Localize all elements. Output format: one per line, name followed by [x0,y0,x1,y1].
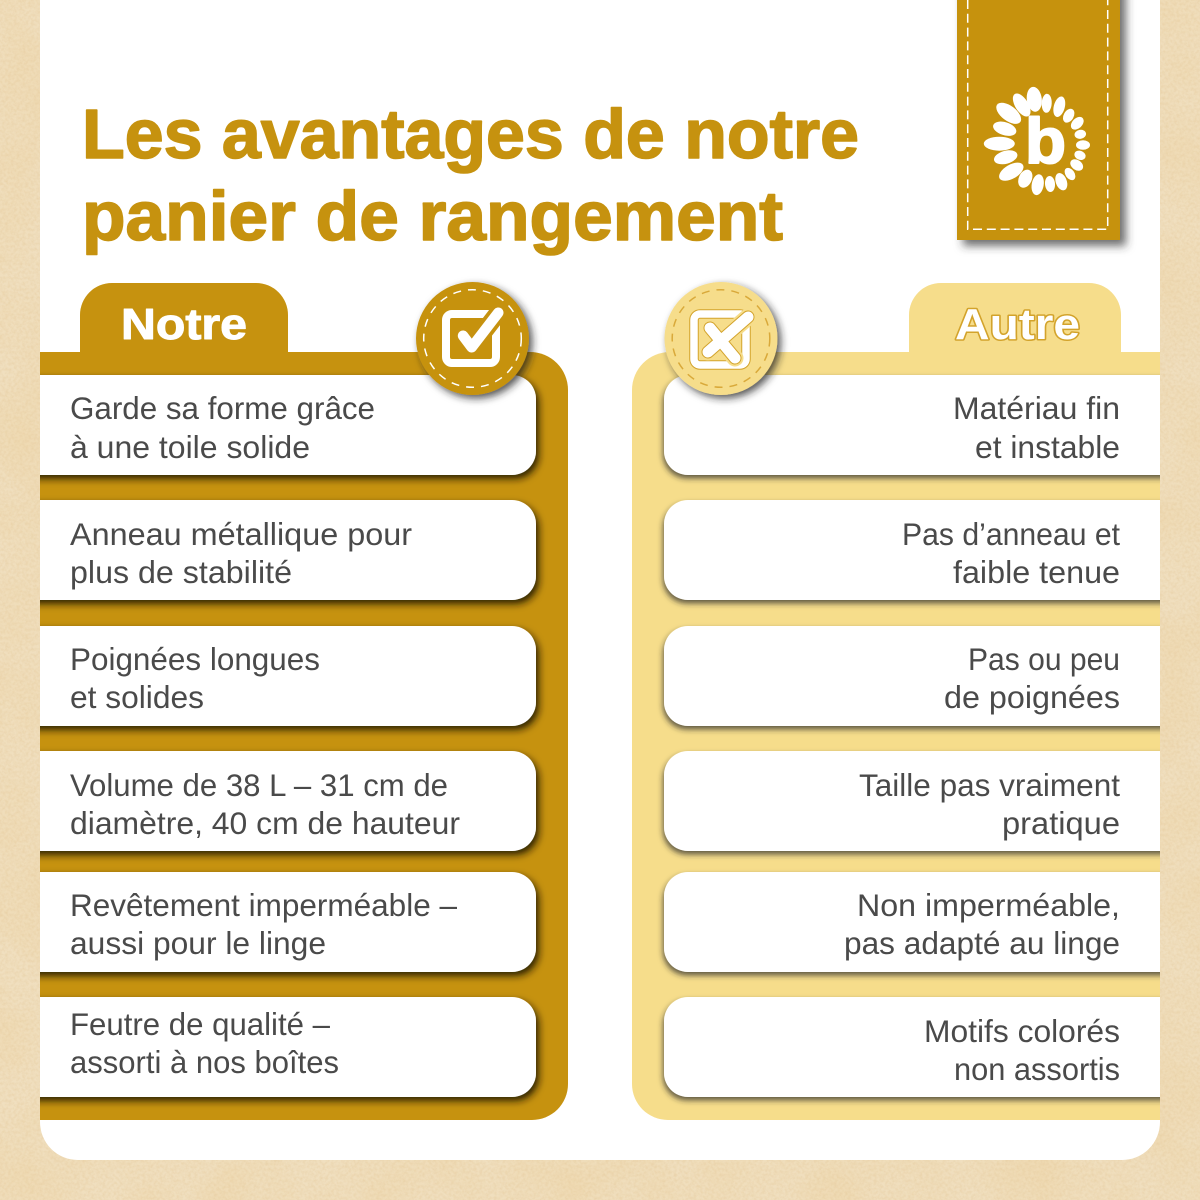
card: non imperméable: pas adapté au linge [844,925,1120,961]
card: matériau [664,375,1200,475]
card: pas de poignées: de poignées [944,679,1120,715]
card: feutre: Feutre de qualité – [70,1006,330,1042]
card: pas d'anneau: faible tenue [953,554,1120,590]
card: non imperméable: Non imperméable, [857,887,1120,923]
icon: cross badge [664,282,778,395]
title [82,95,859,255]
icon: check badge [416,282,529,395]
card: motifs [664,997,1200,1097]
card: poignées [0,626,536,726]
card: matériau: Matériau fin [953,390,1120,426]
card: toile solide: à une toile solide [70,429,310,465]
card: toile solide: Garde sa forme grâce [70,390,375,426]
card: pas de poignées [664,626,1200,726]
card: taille [664,751,1200,851]
panel: Autre [632,283,1200,1120]
panel background: Autre [632,352,1200,1120]
panel background: Notre [0,352,568,1120]
tab: Autre: Autre [955,300,1080,349]
card: poignées: et solides [70,679,204,715]
card: anneau métallique: Anneau métallique pour [70,516,412,552]
card: pas de poignées: Pas ou peu [968,641,1120,677]
card: poignées: Poignées longues [70,641,320,677]
title: panier de rangement [82,177,783,255]
card: taille: Taille pas vraiment [859,767,1120,803]
card: volume [0,751,536,851]
card: motifs: Motifs colorés [924,1013,1120,1049]
icon: sunflower logo: b [1025,105,1066,177]
card: non imperméable [664,872,1200,972]
title: Les avantages de notre [82,95,859,173]
card: volume: Volume de 38 L – 31 cm de [70,767,448,803]
card: feutre: assorti à nos boîtes [70,1044,339,1080]
card: matériau: et instable [975,429,1120,465]
tab: Notre: Notre [121,300,247,349]
card: revêtement [0,872,536,972]
icon: sunflower logo [984,86,1090,196]
brand tag [957,0,1120,240]
card: pas d'anneau: Pas d’anneau et [902,516,1120,552]
tab: Notre [80,283,288,352]
card: pas d'anneau [664,500,1200,600]
card: taille: pratique [1002,805,1120,841]
card: revêtement: Revêtement imperméable – [70,887,457,923]
card: anneau métallique: plus de stabilité [70,554,292,590]
card: toile solide [0,375,536,475]
card: feutre [0,997,536,1097]
tab: Autre [909,283,1121,352]
card: motifs: non assortis [954,1051,1120,1087]
card: volume: diamètre, 40 cm de hauteur [70,805,460,841]
card: anneau métallique [0,500,536,600]
panel: Notre [0,283,568,1120]
card: revêtement: aussi pour le linge [70,925,326,961]
